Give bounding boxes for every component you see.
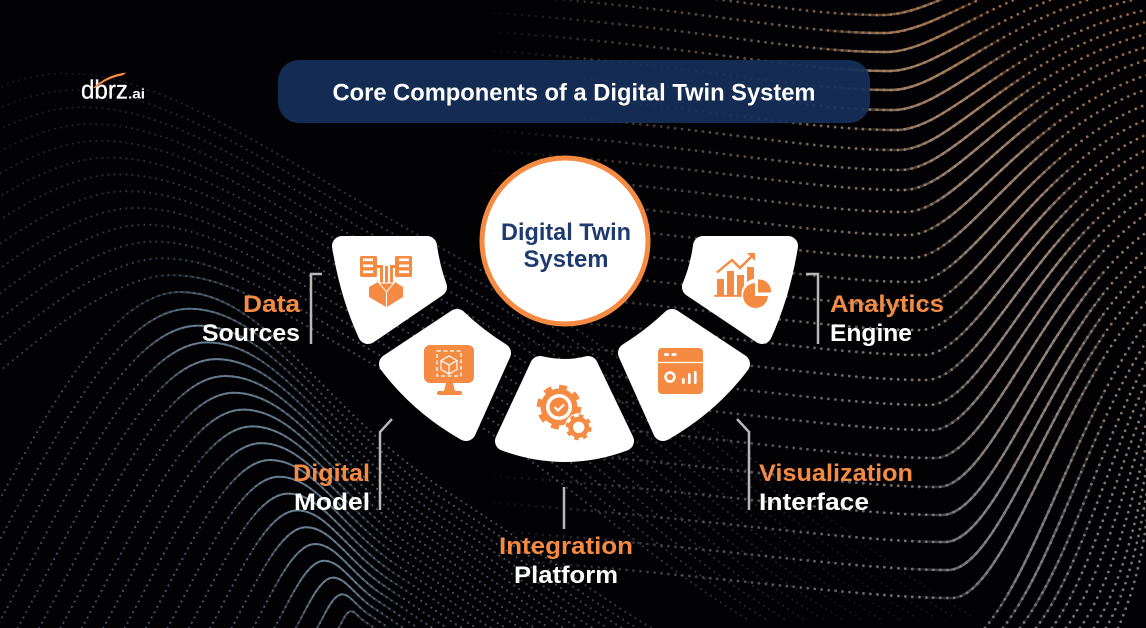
label: Analytics Engine	[830, 291, 944, 347]
central hub: Digital Twin System: Digital Twin	[501, 219, 631, 246]
label: Visualization Interface: Interface	[759, 489, 869, 516]
connector: Integration Platform	[563, 487, 565, 529]
panel: Data Sources tile	[342, 246, 437, 334]
icon: gears with check	[539, 387, 593, 441]
icon: browser window with chart	[658, 348, 703, 394]
label: Integration Platform: Integration	[499, 533, 633, 560]
label: Visualization Interface: Visualization	[759, 460, 913, 487]
label: Data Sources: Sources	[202, 320, 300, 347]
connector: Visualization Interface	[737, 419, 749, 510]
logo: dbrz.ai: dbrz	[81, 74, 128, 104]
connector: Analytics Engine	[806, 274, 818, 344]
panel: Visualization Interface tile	[628, 319, 740, 431]
logo: dbrz.ai: .ai	[128, 86, 145, 102]
title banner	[278, 60, 870, 123]
icon: monitor with 3D cube	[424, 345, 474, 395]
panel: Digital Model tile	[389, 319, 501, 431]
central hub: Digital Twin System	[482, 158, 648, 324]
title banner: Core Components of a Digital Twin System	[332, 80, 816, 106]
icon: bar chart, trend arrow and pie	[714, 253, 772, 310]
label: Data Sources	[202, 291, 301, 347]
connector: Data Sources	[311, 274, 322, 344]
label: Visualization Interface	[759, 460, 913, 516]
central hub: Digital Twin System: System	[524, 246, 608, 273]
label: Analytics Engine: Analytics	[830, 291, 944, 318]
label: Data Sources: Data	[243, 291, 301, 318]
icon: databases flowing into box	[360, 256, 412, 307]
panel: Integration Platform tile	[505, 366, 624, 452]
label: Integration Platform: Platform	[514, 562, 618, 589]
label: Digital Model	[293, 460, 370, 516]
connector: Digital Model	[380, 419, 392, 510]
panel: Analytics Engine tile	[692, 246, 788, 334]
label: Integration Platform	[499, 533, 633, 589]
label: Digital Model: Digital	[293, 460, 370, 487]
label: Digital Model: Model	[294, 489, 370, 516]
label: Analytics Engine: Engine	[830, 320, 912, 347]
